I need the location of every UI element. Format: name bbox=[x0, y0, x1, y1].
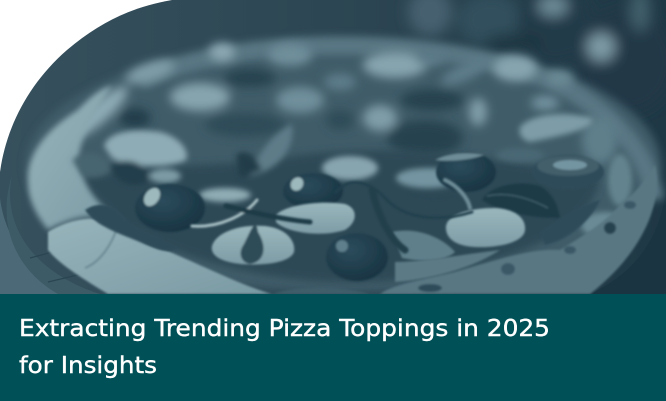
title bbox=[19, 314, 550, 379]
arugula leaves bbox=[192, 180, 472, 250]
front crust bbox=[48, 165, 657, 294]
cherry tomatoes and basil bbox=[135, 152, 560, 281]
pizza base bbox=[25, 38, 661, 292]
mid toppings bbox=[72, 114, 632, 238]
wooden board bbox=[0, 178, 613, 294]
title: for Insights bbox=[19, 351, 157, 379]
background tomatoes bbox=[405, 0, 656, 72]
left crust bbox=[28, 86, 125, 230]
title banner bbox=[0, 294, 666, 401]
pizza photograph bbox=[0, 0, 666, 294]
mozzarella and cucumber slices bbox=[212, 203, 525, 265]
sauce and herb texture bbox=[85, 200, 600, 282]
dark toppings bed bbox=[75, 150, 600, 283]
blurred far toppings bbox=[67, 43, 618, 164]
tomato slice bbox=[538, 156, 604, 182]
title: Extracting Trending Pizza Toppings in 2025 bbox=[19, 314, 550, 342]
